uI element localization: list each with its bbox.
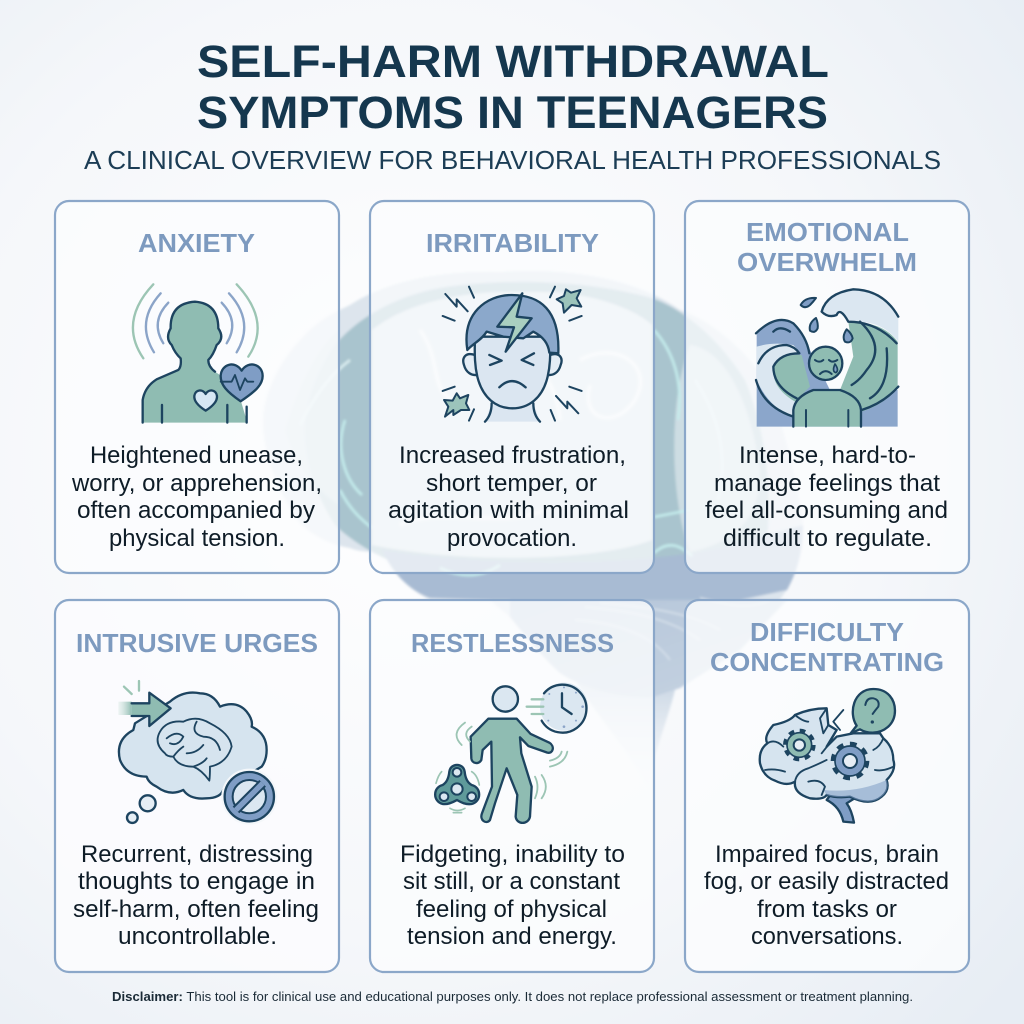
heading: difficulty concentrating xyxy=(710,617,944,677)
icon: person with heart and vibrations xyxy=(133,284,263,423)
icon: fidgeting figure with clock and spinner xyxy=(435,683,588,823)
description: anxiety xyxy=(71,442,322,552)
description: emotional overwhelm: feel all-consuming and xyxy=(705,497,948,524)
title: SELF-HARM WITHDRAWAL xyxy=(197,36,829,87)
heading: intrusive urges: INTRUSIVE URGES xyxy=(76,628,318,658)
description: irritability xyxy=(388,442,629,552)
panel: difficulty concentrating xyxy=(685,600,969,972)
heading: restlessness: RESTLESSNESS xyxy=(411,628,614,658)
description: emotional overwhelm: Intense, hard-to- xyxy=(739,442,916,469)
description: restlessness: tension and energy. xyxy=(407,923,617,950)
description: emotional overwhelm xyxy=(705,442,948,552)
heading: irritability: IRRITABILITY xyxy=(426,228,599,258)
description: difficulty concentrating: Impaired focus, brain xyxy=(715,841,939,868)
icon: person under waves xyxy=(756,289,898,427)
description: anxiety: Heightened unease, xyxy=(90,442,303,469)
description: irritability: provocation. xyxy=(447,525,577,552)
description: anxiety: worry, or apprehension, xyxy=(71,470,322,497)
title: SYMPTOMS IN TEENAGERS xyxy=(197,87,828,138)
description: intrusive urges: Recurrent, distressing xyxy=(81,841,313,868)
heading: emotional overwhelm: EMOTIONAL xyxy=(746,217,909,247)
panel: irritability xyxy=(370,201,654,573)
description: restlessness xyxy=(400,841,625,950)
description: difficulty concentrating: from tasks or xyxy=(757,896,897,923)
panel: emotional overwhelm xyxy=(685,201,969,573)
icon: angry face with lightning xyxy=(443,287,582,422)
subtitle: A CLINICAL OVERVIEW FOR BEHAVIORAL HEALTH PROFESSIONALS xyxy=(84,145,941,175)
title xyxy=(197,36,829,138)
description: difficulty concentrating: conversations. xyxy=(751,923,903,950)
description: emotional overwhelm: manage feelings that xyxy=(714,470,940,497)
description: irritability: Increased frustration, xyxy=(399,442,626,469)
description: anxiety: physical tension. xyxy=(109,525,285,552)
description: irritability: short temper, or xyxy=(426,470,597,497)
heading: anxiety: ANXIETY xyxy=(138,228,255,258)
icon: thought cloud with brain, arrow and prohibition sign xyxy=(118,681,277,825)
icon: cracked brain with gears and question bubble xyxy=(760,689,895,823)
description: restlessness: Fidgeting, inability to xyxy=(400,841,625,868)
description: difficulty concentrating xyxy=(704,841,949,950)
heading: emotional overwhelm xyxy=(737,217,917,277)
description: anxiety: often accompanied by xyxy=(77,497,315,524)
background brain illustration xyxy=(263,271,803,790)
disclaimer: Disclaimer: This tool is for clinical use and educational purposes only. It does not replace professional assessment or treatment planning. xyxy=(112,989,913,1004)
description: emotional overwhelm: difficult to regulate. xyxy=(723,525,932,552)
heading: difficulty concentrating: CONCENTRATING xyxy=(710,647,944,677)
description: intrusive urges xyxy=(73,841,319,950)
description: irritability: agitation with minimal xyxy=(388,497,629,524)
description: intrusive urges: self-harm, often feeling xyxy=(73,896,319,923)
panel: intrusive urges xyxy=(55,600,339,972)
heading: difficulty concentrating: DIFFICULTY xyxy=(750,617,904,647)
description: intrusive urges: uncontrollable. xyxy=(118,923,277,950)
heading: emotional overwhelm: OVERWHELM xyxy=(737,247,917,277)
description: restlessness: feeling of physical xyxy=(416,896,607,923)
description: difficulty concentrating: fog, or easily distracted xyxy=(704,868,949,895)
description: restlessness: sit still, or a constant xyxy=(403,868,620,895)
description: intrusive urges: thoughts to engage in xyxy=(78,868,315,895)
panel: restlessness xyxy=(370,600,654,972)
panel: anxiety xyxy=(55,201,339,573)
